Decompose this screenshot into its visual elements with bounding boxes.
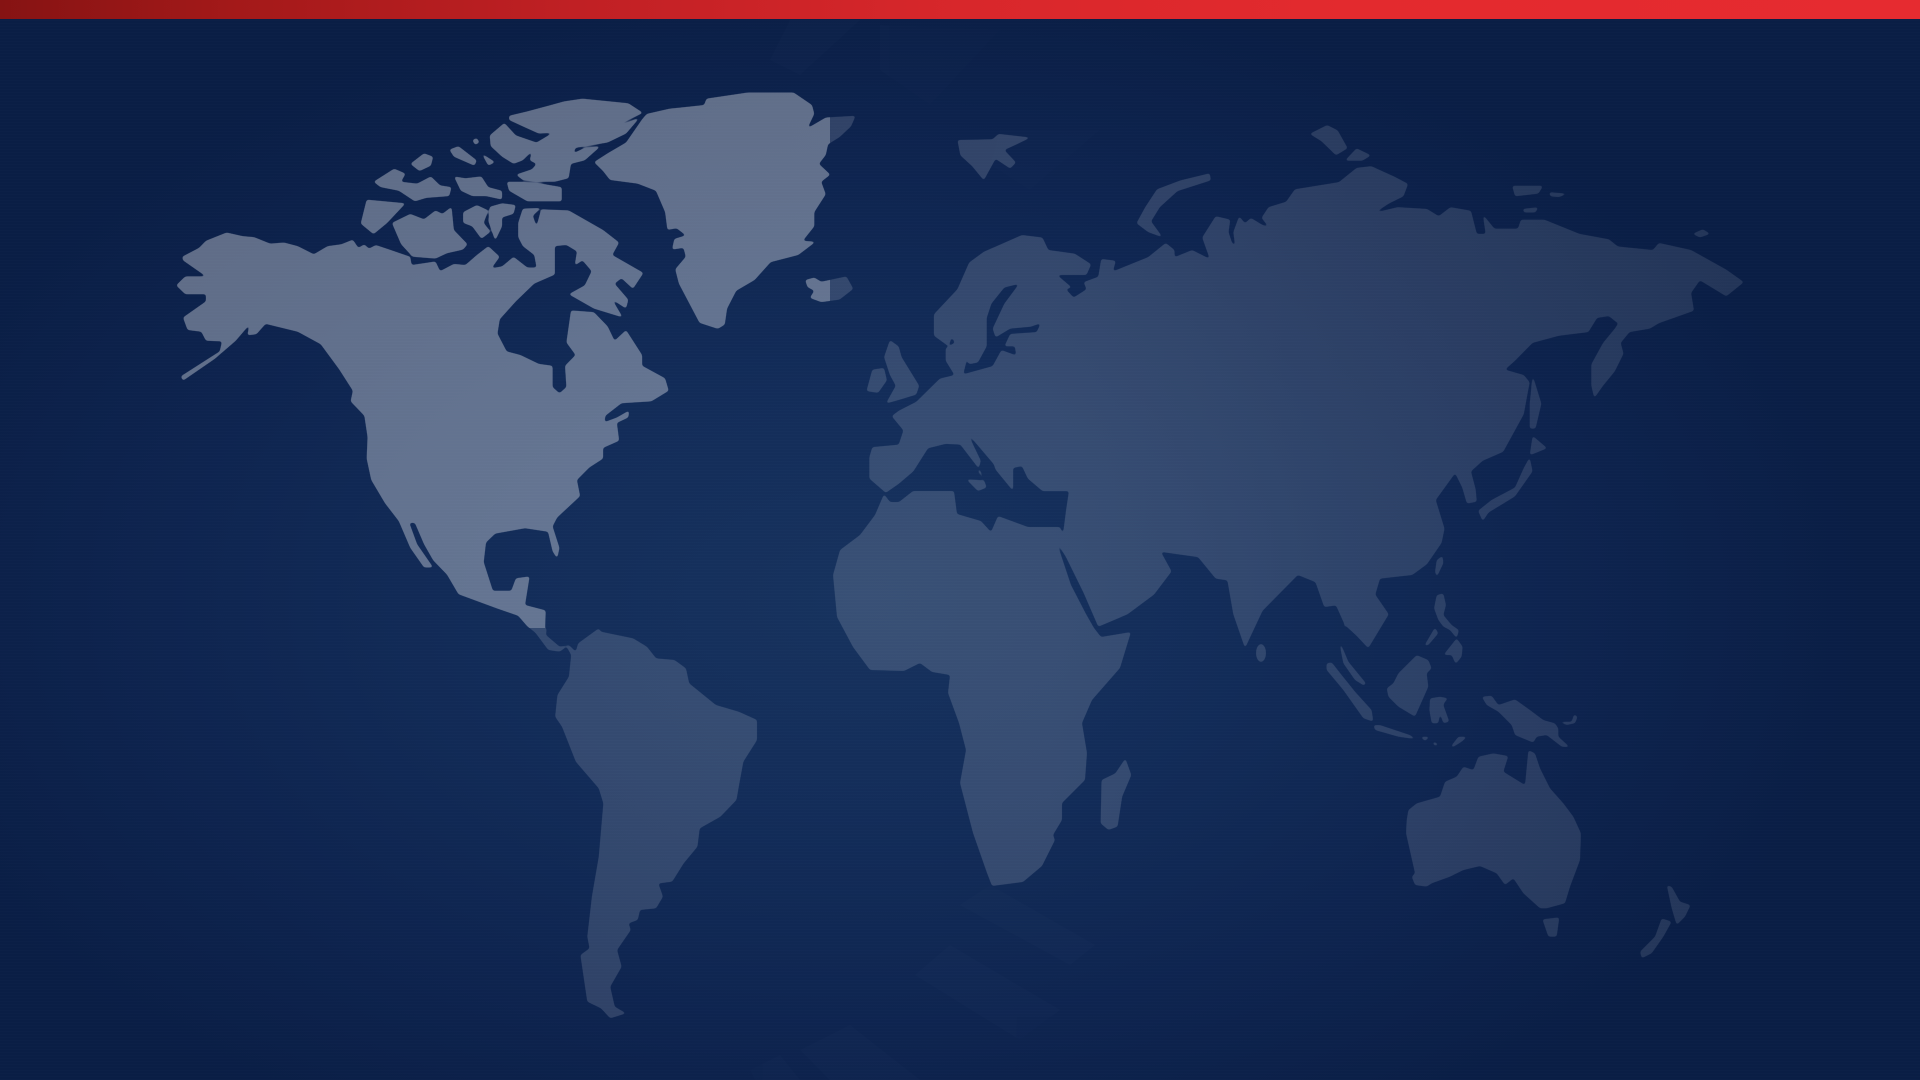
Sulawesi: [1429, 697, 1449, 723]
Borneo: [1387, 655, 1432, 717]
Eurasia mainland: [869, 166, 1744, 648]
North America mainland: [176, 208, 669, 640]
continent: Africa: [833, 491, 1131, 886]
lighter highlight over North America and Greenland: [176, 92, 856, 640]
Sakhalin: [1530, 375, 1541, 429]
Greenland: [594, 92, 856, 329]
Madagascar: [1101, 758, 1131, 830]
Arctic Russian islands: [1310, 125, 1710, 237]
United Kingdom: [884, 340, 919, 404]
Taiwan: [1435, 556, 1443, 577]
Arctic islands: [361, 99, 643, 259]
continent: Eurasia: [866, 125, 1744, 648]
Philippines: [1424, 593, 1463, 664]
Svalbard: [957, 134, 1031, 180]
Iceland: [805, 276, 853, 302]
New Britain: [1558, 714, 1578, 725]
Australia: [1406, 750, 1581, 908]
Novaya Zemlya: [1136, 173, 1211, 237]
Sumatra: [1327, 662, 1373, 722]
Sri Lanka: [1256, 644, 1266, 662]
top red gradient bar: [0, 0, 1920, 19]
Ireland: [866, 368, 887, 393]
faint diagonal background rays: [750, 20, 1100, 1080]
world map: [177, 92, 1743, 1018]
Java and lesser islands: [1373, 725, 1467, 747]
New Zealand: [1640, 885, 1691, 958]
continent: South America: [532, 628, 757, 1018]
region: Southeast Asia and Oceania: [1327, 556, 1691, 958]
Malay peninsula: [1340, 622, 1366, 686]
Tasmania: [1542, 917, 1559, 937]
continent: North America and Greenland: [176, 92, 856, 640]
Japan: [1478, 436, 1547, 521]
New Guinea: [1482, 696, 1570, 747]
